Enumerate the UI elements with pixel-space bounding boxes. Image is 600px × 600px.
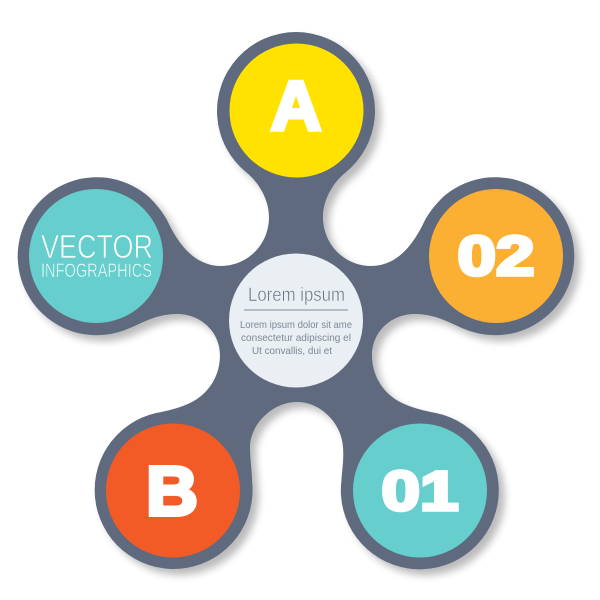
center body text: Ut convallis, dui et: [252, 345, 332, 357]
label: VECTOR: VECTOR: [41, 228, 153, 265]
center body text: [240, 319, 352, 357]
number 01: 01: [382, 459, 458, 522]
letter A: A: [271, 67, 321, 145]
node: A: [230, 44, 364, 178]
node: vector infographics: [29, 189, 163, 323]
center panel: [229, 254, 363, 388]
label: INFOGRAPHICS: INFOGRAPHICS: [41, 261, 152, 282]
center heading: Lorem ipsum: [248, 285, 345, 306]
letter B: B: [146, 452, 198, 530]
node: B: [106, 424, 240, 558]
center body text: consectetur adipiscing el: [241, 332, 351, 344]
number 02: 02: [458, 224, 534, 287]
node: 01: [353, 424, 487, 558]
center body text: Lorem ipsum dolor sit ame: [240, 319, 352, 331]
node: 02: [429, 189, 563, 323]
